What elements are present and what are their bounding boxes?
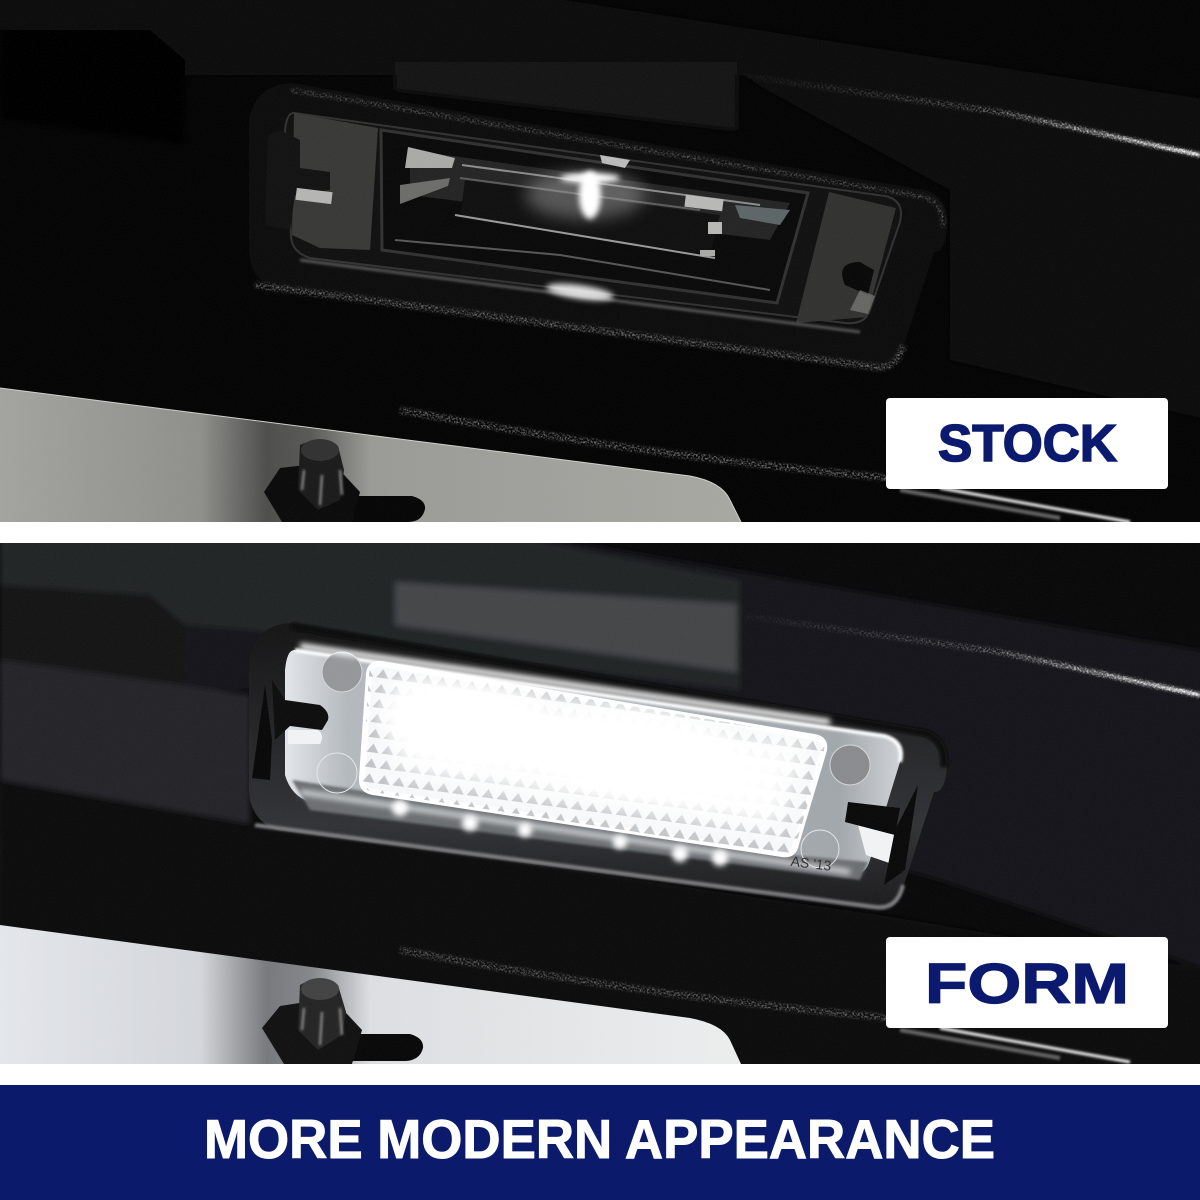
- upper body panel: [0, 0, 1200, 420]
- lamp circuit board: [300, 147, 860, 332]
- mounting bolt: [264, 439, 425, 522]
- lower body reflection: [400, 950, 1130, 1062]
- edge leds: [392, 800, 728, 866]
- panel: stock lamp photo: [0, 0, 1200, 522]
- banner: [0, 1085, 1200, 1200]
- bezel: [249, 83, 947, 370]
- bezel: [249, 623, 947, 910]
- highlight streak upper right: [745, 616, 1200, 695]
- label: form: [886, 937, 1168, 1028]
- lower body reflection: [400, 410, 1130, 522]
- label: form: FORM: [925, 952, 1129, 1016]
- label: stock: [886, 398, 1168, 489]
- license plate: [0, 388, 741, 522]
- lens: [265, 113, 901, 323]
- mounting bolt: [262, 978, 423, 1064]
- illuminated led panel: [296, 639, 834, 858]
- lens: [252, 650, 918, 885]
- panel: form lamp photo: [0, 530, 1200, 1070]
- label: stock: STOCK: [938, 415, 1117, 473]
- license plate: [0, 925, 741, 1064]
- lamp glare: [525, 155, 645, 304]
- upper body panel: [0, 530, 1200, 1070]
- banner heading: MORE MODERN APPEARANCE: [204, 1108, 995, 1170]
- highlight streak upper right: [745, 76, 1200, 155]
- mirrored lens text: AS '13: [790, 853, 833, 874]
